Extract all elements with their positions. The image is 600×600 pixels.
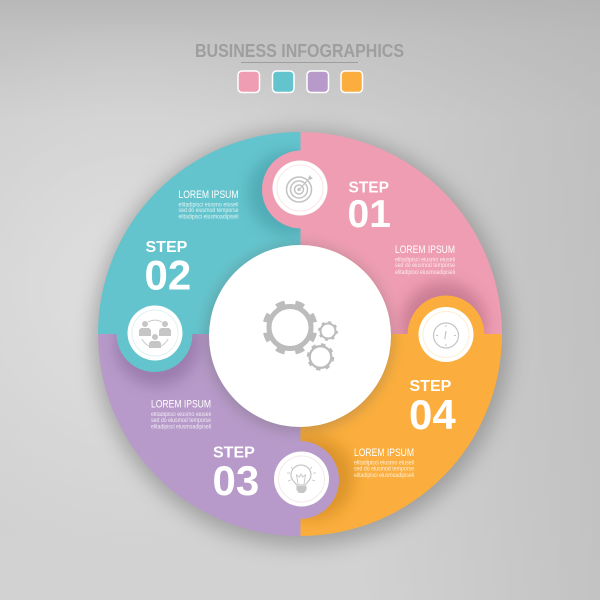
text block: step 02: elitadipisci eiusmo eiuseli: [178, 202, 238, 208]
text block: step 02: [178, 189, 239, 220]
text block: step 02: LOREM IPSUM: [178, 189, 239, 201]
icon: small gear: [319, 322, 337, 340]
pink tab: [262, 150, 301, 228]
icon: light bulb: [274, 452, 329, 506]
orange tab: [408, 296, 484, 335]
step 01 label: STEP: [348, 180, 389, 196]
text block: step 01: sed do eiusmod temporse: [395, 263, 456, 269]
colour legend squares: [238, 71, 362, 92]
step 02 label: STEP: [146, 239, 188, 256]
text block: step 04: elitadipisci eiusmo eiuseli: [354, 460, 414, 466]
central circle shadow: [206, 245, 392, 431]
tab shadows: [115, 151, 486, 520]
text block: step 03: sed do eiusmod temporse: [151, 418, 212, 424]
disk drop shadow: [94, 130, 510, 546]
text block: step 04: [354, 447, 415, 479]
icon: people network: [128, 306, 182, 360]
step 03 label: STEP: [213, 444, 255, 462]
step 03 label: 03: [212, 457, 259, 504]
panel: step 03 purple quarter: [98, 334, 300, 536]
text block: step 03: elitadipisci eiusmo eiuseli: [151, 412, 211, 418]
icon: large gear: [260, 298, 320, 357]
purple tab: [300, 441, 339, 519]
text block: step 04: sed do eiusmod temporse: [354, 466, 415, 472]
text block: step 01: elitadipisci eiusmoadipiseli: [395, 270, 455, 276]
step 01 label: 01: [348, 193, 391, 236]
step 02 label: 02: [144, 252, 191, 298]
text block: step 02: sed do eiusmod temporse: [178, 208, 239, 214]
text block: step 01: elitadipisci eiusmo eiuseli: [395, 258, 455, 264]
icon: clock: [418, 307, 474, 362]
icon: medium gear: [308, 344, 333, 370]
icon: target: [272, 160, 328, 216]
panel: step 02 teal quarter: [98, 132, 300, 334]
text block: step 01: LOREM IPSUM: [395, 244, 455, 256]
text block: step 03: [151, 398, 212, 430]
step 04 label: 04: [409, 391, 456, 438]
step 04 label: STEP: [410, 378, 452, 395]
central white circle with gears: [209, 245, 391, 427]
text block: step 03: elitadipisci eiusmoadipiseli: [151, 424, 211, 430]
title: BUSINESS INFOGRAPHICS: [195, 40, 404, 61]
text block: step 04: elitadipisci eiusmoadipiseli: [354, 473, 414, 479]
text block: step 03: LOREM IPSUM: [151, 398, 211, 410]
panel: step 01 pink quarter: [300, 132, 502, 334]
panel: step 04 orange quarter: [300, 334, 502, 536]
text block: step 01: [395, 244, 456, 276]
text block: step 02: elitadipisci eiusmoadipiseli: [178, 214, 238, 220]
teal tab: [116, 334, 192, 372]
text block: step 04: LOREM IPSUM: [354, 447, 414, 459]
